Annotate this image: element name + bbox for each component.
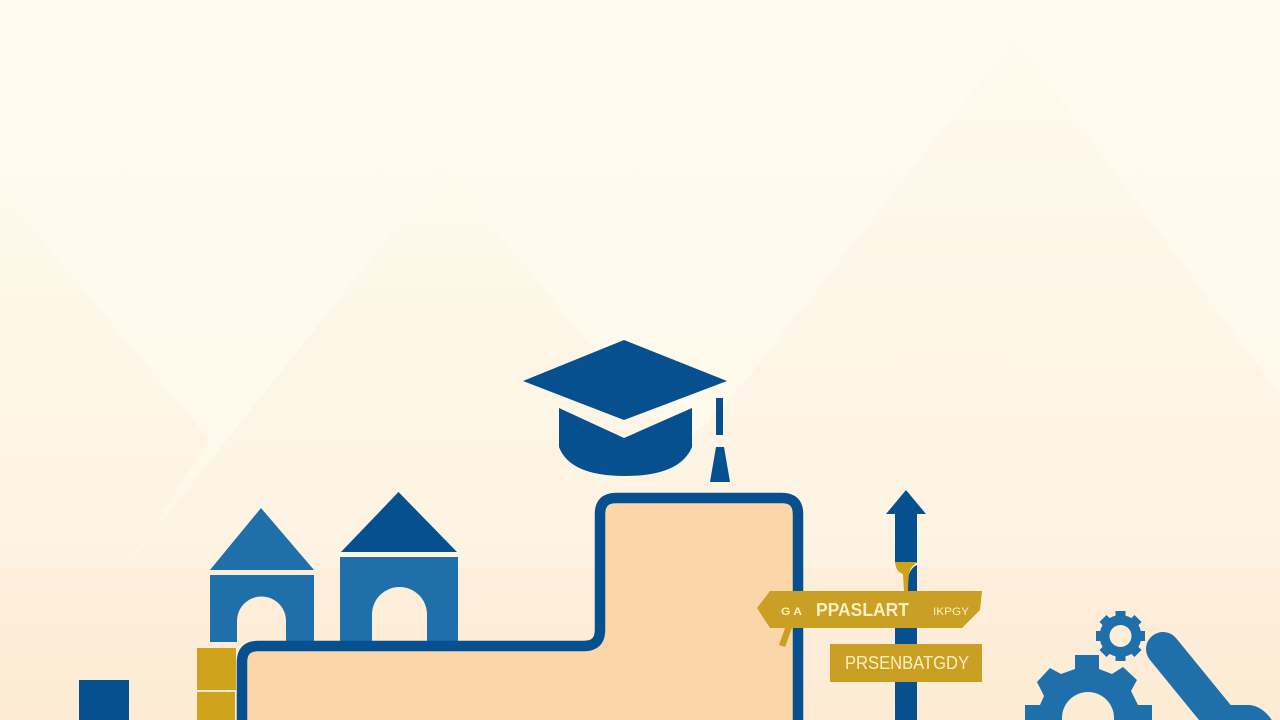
icon: small gear [1096,611,1145,661]
icon: large house right [340,492,458,642]
sign: upper arrow [757,591,982,628]
sign: lower rectangle [830,644,982,682]
gold hanging strip [779,628,792,647]
icon: large gear [1025,655,1152,720]
icon: gold blocks [197,648,236,720]
ground band [0,568,1280,720]
staircase platform [242,498,798,720]
icon: wrench [1163,649,1273,720]
sign: upper arrow: PPASLART [816,600,909,620]
sign: lower rectangle: PRSENBATGDY [845,653,969,673]
background mountains [0,38,1280,568]
sign: upper arrow: G A [781,606,802,618]
signpost pole with arrow [886,490,926,720]
icon: graduation cap [523,340,730,482]
gold collar on pole [895,562,917,592]
signpost [757,490,982,720]
sign: upper arrow: IKPGY [933,606,970,618]
background sky [0,0,1280,568]
icon: small house left [210,508,314,642]
icon: blue square block [79,680,129,720]
